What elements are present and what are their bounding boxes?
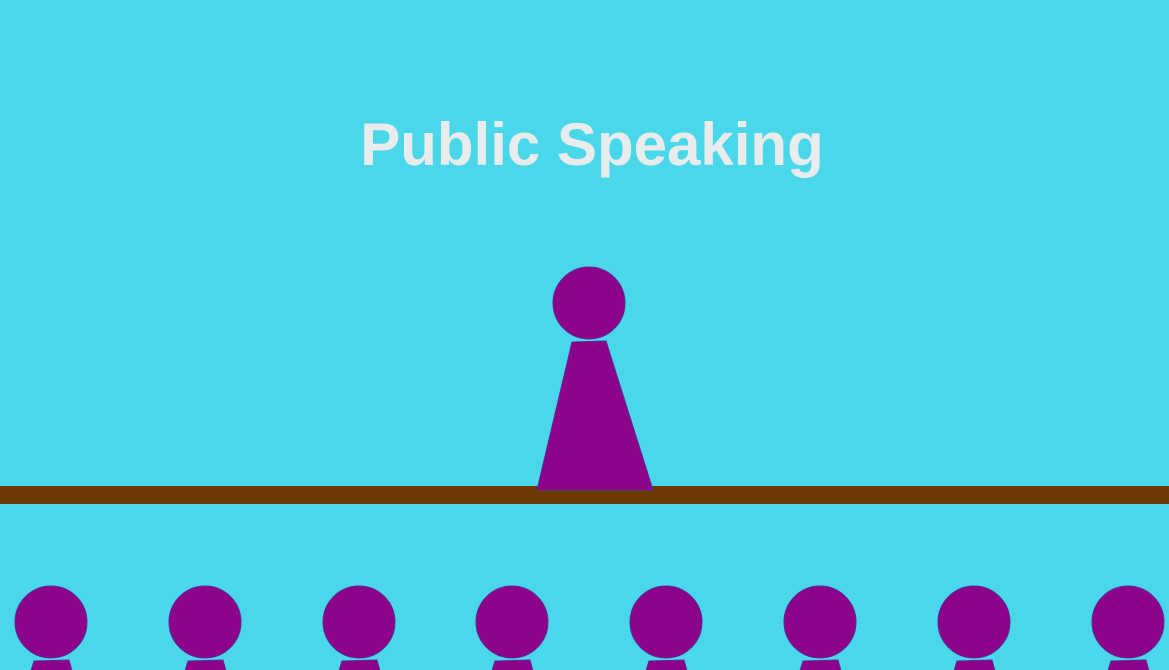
- speaker figure: [537, 267, 653, 490]
- title: Public Speaking: [360, 111, 824, 178]
- stage floor: [0, 486, 1169, 504]
- audience: [15, 586, 1164, 670]
